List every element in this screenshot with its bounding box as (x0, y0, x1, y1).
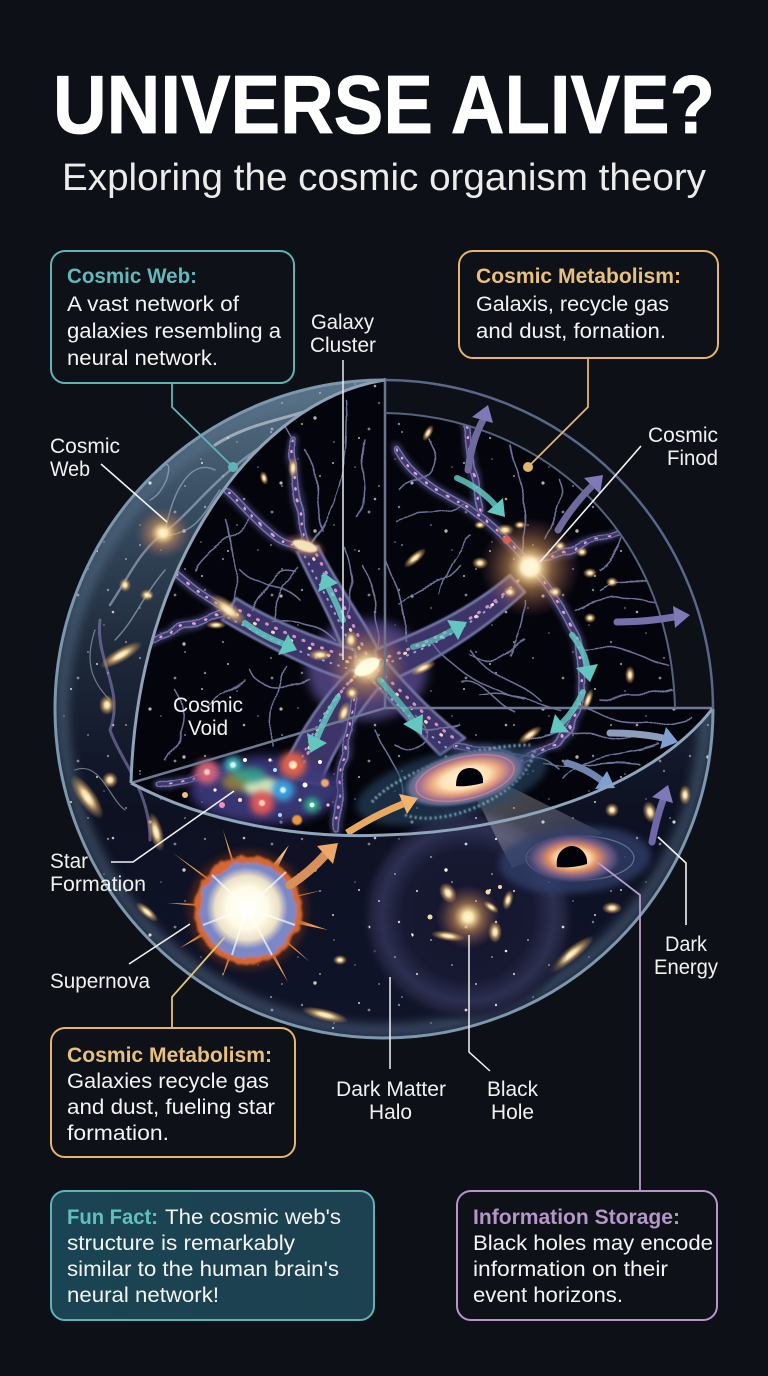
label: galaxy cluster: Galaxy (311, 311, 374, 334)
fun fact body: neural network! (67, 1284, 219, 1307)
callout: cosmic web (51, 251, 294, 383)
label: cosmic finod: Cosmic (648, 424, 718, 447)
callout body: formation. (67, 1122, 169, 1145)
label: dark energy (654, 837, 718, 979)
callout body: and dust, fueling star (67, 1096, 275, 1119)
callout body (473, 1232, 713, 1307)
fun fact body: structure is remarkably (67, 1232, 296, 1255)
label: star formation (50, 791, 234, 896)
galaxies inside the web (204, 423, 635, 747)
dark matter halo (360, 807, 576, 1023)
black hole: galaxy core (349, 728, 555, 842)
callout: cosmic metabolism top (459, 251, 718, 358)
label: cosmic void (173, 694, 243, 740)
central galaxy cluster (428, 879, 515, 949)
callout heading: Cosmic Metabolism: (476, 265, 681, 288)
callout body: event horizons. (473, 1284, 623, 1307)
callout heading: Information Storage: (473, 1206, 680, 1229)
callout heading: Cosmic Web: (67, 265, 197, 288)
callout heading: Cosmic Metabolism: (67, 1044, 272, 1067)
fun fact body (67, 1206, 341, 1307)
label: black hole: Black (487, 1078, 538, 1101)
label: dark energy: Dark (665, 933, 707, 956)
outer rim (55, 380, 713, 1038)
label: cosmic web: Web (50, 458, 90, 481)
projection cone (473, 783, 603, 868)
label: black hole: Hole (491, 1101, 534, 1124)
callout body: information on their (473, 1258, 668, 1281)
cosmic sphere illustration (55, 370, 720, 1040)
label: star formation: Formation (50, 873, 146, 896)
lower plane rim (131, 708, 713, 836)
leader: cosmic web callout (172, 383, 238, 472)
label: dark matter halo: Halo (369, 1101, 412, 1124)
label: dark energy: Energy (654, 956, 718, 979)
subtitle: Exploring the cosmic organism theory (62, 157, 706, 199)
inner cut interior (120, 370, 720, 850)
leader: cosmic metabolism bottom (172, 937, 225, 1028)
callout body: Galaxis, recycle gas (476, 293, 669, 316)
flow arrows: teal (245, 478, 598, 753)
label: cosmic void: Void (188, 717, 228, 740)
callout: fun fact (51, 1191, 374, 1320)
leader: information storage (597, 862, 640, 1191)
label: dark matter halo (336, 977, 446, 1124)
flow arrows: orange (290, 794, 418, 885)
supernova (167, 830, 328, 982)
label: cosmic void: Cosmic (173, 694, 243, 717)
label: dark matter halo: Dark Matter (336, 1078, 446, 1101)
callout body: A vast network of (67, 293, 239, 316)
fun fact heading: Fun Fact: (67, 1206, 158, 1229)
label: galaxy cluster: Cluster (310, 334, 376, 357)
label: supernova (50, 924, 190, 993)
fun fact body: The cosmic web's (165, 1206, 341, 1229)
fun fact body: similar to the human brain's (67, 1258, 339, 1281)
filament network (150, 395, 690, 830)
callout body: Galaxies recycle gas (67, 1070, 269, 1093)
callout body: galaxies resembling a (67, 320, 281, 343)
callout body (67, 1070, 275, 1145)
label: supernova: Supernova (50, 970, 150, 993)
star formation nebula (182, 752, 340, 825)
label: star formation: Star (50, 850, 88, 873)
callout body: neural network. (67, 347, 218, 370)
sphere shell (55, 380, 715, 1040)
label: galaxy cluster (310, 311, 376, 660)
filament arms around central hub (222, 546, 525, 785)
label: cosmic web: Cosmic (50, 435, 120, 458)
leader: cosmic metabolism top (523, 358, 588, 472)
callout body (67, 293, 281, 370)
label: black hole (469, 935, 538, 1124)
right quadrant cutaway (385, 380, 713, 709)
label: cosmic finod (540, 424, 718, 562)
callout body: Black holes may encode (473, 1232, 713, 1255)
callout: cosmic metabolism bottom (51, 1028, 295, 1157)
plane outlines (131, 378, 713, 783)
black hole: enlarged view (497, 822, 653, 898)
flow arrows: violet expansion (468, 405, 690, 842)
label: cosmic finod: Finod (667, 447, 718, 470)
callout body: and dust, fornation. (476, 320, 666, 343)
callout body (476, 293, 669, 343)
label: cosmic web (50, 435, 167, 522)
callout: information storage (457, 1191, 717, 1320)
